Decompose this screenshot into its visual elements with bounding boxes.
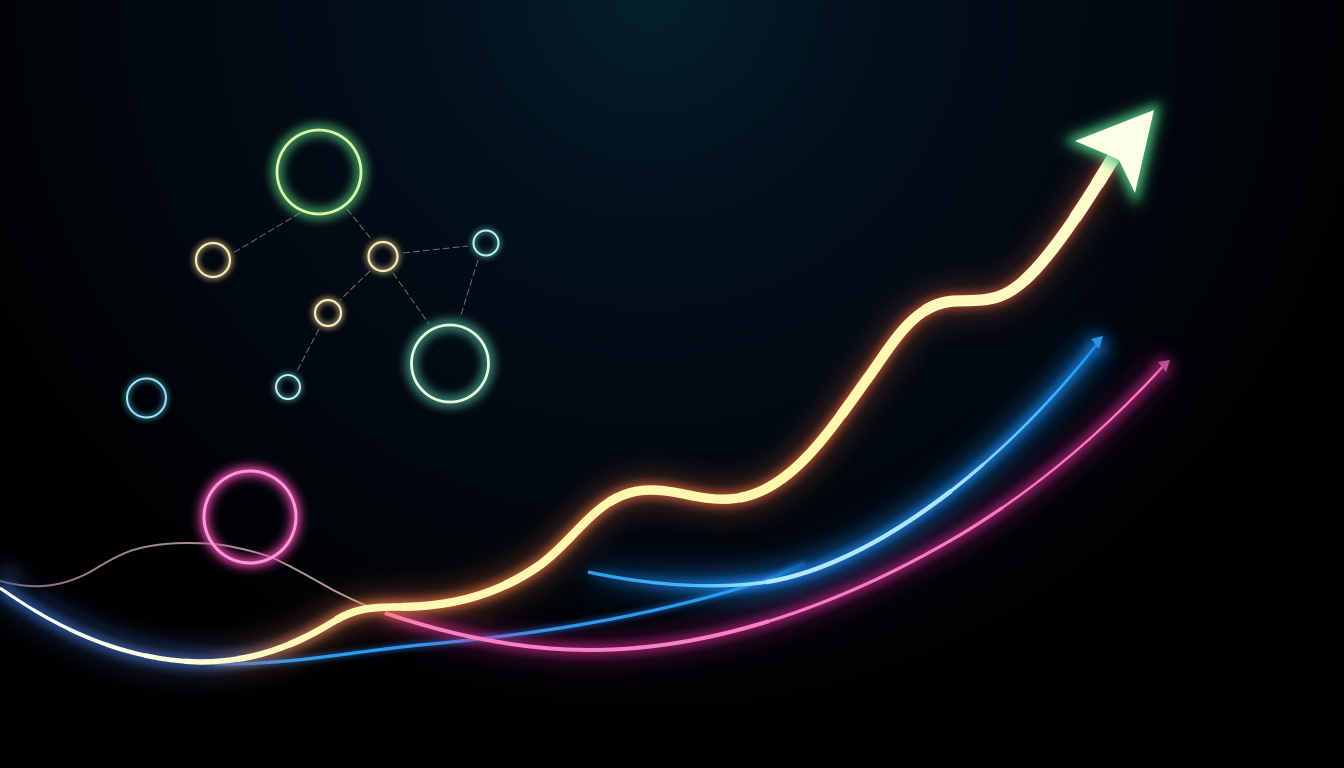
main growth line with arrow (0, 110, 1154, 662)
mauve thin curve (0, 543, 367, 606)
network diagram (0, 130, 498, 606)
blue arrowhead (1091, 336, 1103, 349)
cream node left (196, 243, 230, 277)
teal node bottom (276, 375, 300, 399)
teal node top right (474, 230, 498, 256)
tapered core (0, 150, 1118, 662)
cream node centre (368, 242, 398, 271)
blue node isolated (127, 378, 166, 418)
blue trend line with arrow (215, 335, 1108, 664)
pink node (204, 471, 296, 563)
arrowhead (1075, 110, 1154, 193)
dashed connectors (233, 209, 478, 373)
cream node small (315, 300, 341, 326)
pink trend line with arrow (385, 357, 1173, 650)
large green node (277, 130, 361, 214)
large mint node (412, 325, 488, 402)
pink arrowhead (1158, 360, 1170, 372)
faint blue haze lower left (0, 564, 250, 650)
